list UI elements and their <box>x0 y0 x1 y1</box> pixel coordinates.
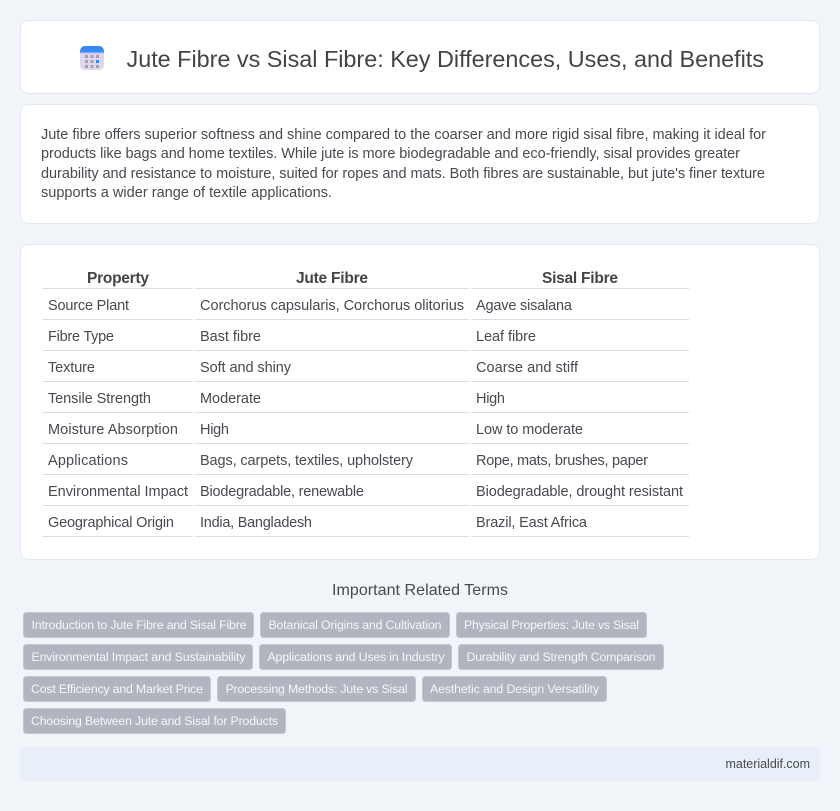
table row: source plant: Corchorus capsularis, Corchorus olitorius <box>200 298 464 314</box>
table row: applications: Rope, mats, brushes, paper <box>476 453 648 469</box>
table row: source plant <box>43 298 689 320</box>
tag: Durability and Strength Comparison <box>466 650 656 664</box>
tag: Physical Properties: Jute vs Sisal <box>464 618 639 632</box>
tag: Environmental Impact and Sustainability <box>32 650 246 664</box>
text block: summary paragraph: Jute fibre offers superior softness and shine compared to the coarser and more rigid sisal fibre, making it ideal for <box>41 127 766 143</box>
heading: related terms: Important Related Terms <box>332 582 508 599</box>
table row: texture: Soft and shiny <box>200 360 292 376</box>
table row: fibre type: Bast fibre <box>200 329 261 345</box>
table row: moisture absorption: Low to moderate <box>476 422 583 438</box>
panel: summary <box>20 104 820 224</box>
text block: summary paragraph: products like bags and home textiles. While jute is more biodegradable and eco-friendly, sisal provides greater <box>41 146 740 162</box>
table header row: Sisal Fibre <box>542 270 618 287</box>
table row: environmental impact: Biodegradable, drought resistant <box>476 484 683 500</box>
table row: fibre type: Fibre Type <box>48 329 114 345</box>
panel: comparison table <box>20 244 820 560</box>
text block: summary paragraph <box>41 127 766 201</box>
table row: moisture absorption <box>43 422 689 444</box>
table header row <box>43 270 689 289</box>
table row: tensile strength <box>43 391 689 413</box>
panel: header <box>20 20 820 94</box>
table row: applications <box>43 453 689 475</box>
icon: calendar <box>80 46 104 70</box>
text block: summary paragraph: supports a wider range of textile applications. <box>41 185 332 201</box>
tag: Aesthetic and Design Versatility <box>430 682 600 696</box>
table row: source plant: Agave sisalana <box>476 298 573 314</box>
tag: Botanical Origins and Cultivation <box>268 618 442 632</box>
tag <box>218 676 416 702</box>
table row: applications: Bags, carpets, textiles, upholstery <box>200 453 414 469</box>
table header row: Jute Fibre <box>296 270 368 287</box>
table row: applications: Applications <box>48 453 128 469</box>
table row: texture: Texture <box>48 360 95 376</box>
tag: Choosing Between Jute and Sisal for Products <box>31 714 278 728</box>
footer <box>20 747 820 781</box>
tag group: related terms <box>24 612 664 734</box>
footer: source: materialdif.com <box>726 757 810 771</box>
tag <box>422 676 606 702</box>
tag <box>24 676 210 702</box>
tag <box>260 612 450 638</box>
text block: summary paragraph: durability and resistance to moisture, suited for ropes and mats. Both fibres are sustainable, but jute's finer texture <box>41 166 765 182</box>
table row: geographical origin: Brazil, East Africa <box>476 515 588 531</box>
tag: Cost Efficiency and Market Price <box>31 682 203 696</box>
tag <box>24 612 254 638</box>
table row: environmental impact <box>43 484 689 506</box>
table row: texture: Coarse and stiff <box>476 360 579 376</box>
tag <box>24 644 252 670</box>
table row: geographical origin: India, Bangladesh <box>200 515 312 531</box>
table row: geographical origin: Geographical Origin <box>48 515 174 531</box>
title: Jute Fibre vs Sisal Fibre: Key Differences, Uses, and Benefits <box>126 46 764 72</box>
tag <box>458 644 664 670</box>
table row: moisture absorption: High <box>200 422 229 438</box>
tag: Applications and Uses in Industry <box>268 650 445 664</box>
tag: Introduction to Jute Fibre and Sisal Fibre <box>32 618 247 632</box>
tag <box>24 708 286 734</box>
table row: environmental impact: Environmental Impact <box>48 484 188 500</box>
table header row: Property <box>87 270 149 287</box>
table row: tensile strength: High <box>476 391 505 407</box>
tag <box>456 612 646 638</box>
table row: tensile strength: Moderate <box>200 391 261 407</box>
table row: tensile strength: Tensile Strength <box>48 391 151 407</box>
table row: fibre type: Leaf fibre <box>476 329 536 345</box>
table row: fibre type <box>43 329 689 351</box>
table row: moisture absorption: Moisture Absorption <box>48 422 178 438</box>
tag <box>260 644 452 670</box>
table row: environmental impact: Biodegradable, renewable <box>200 484 364 500</box>
table row: source plant: Source Plant <box>48 298 129 314</box>
table row: texture <box>43 360 689 382</box>
table row: geographical origin <box>43 515 689 537</box>
tag: Processing Methods: Jute vs Sisal <box>226 682 408 696</box>
